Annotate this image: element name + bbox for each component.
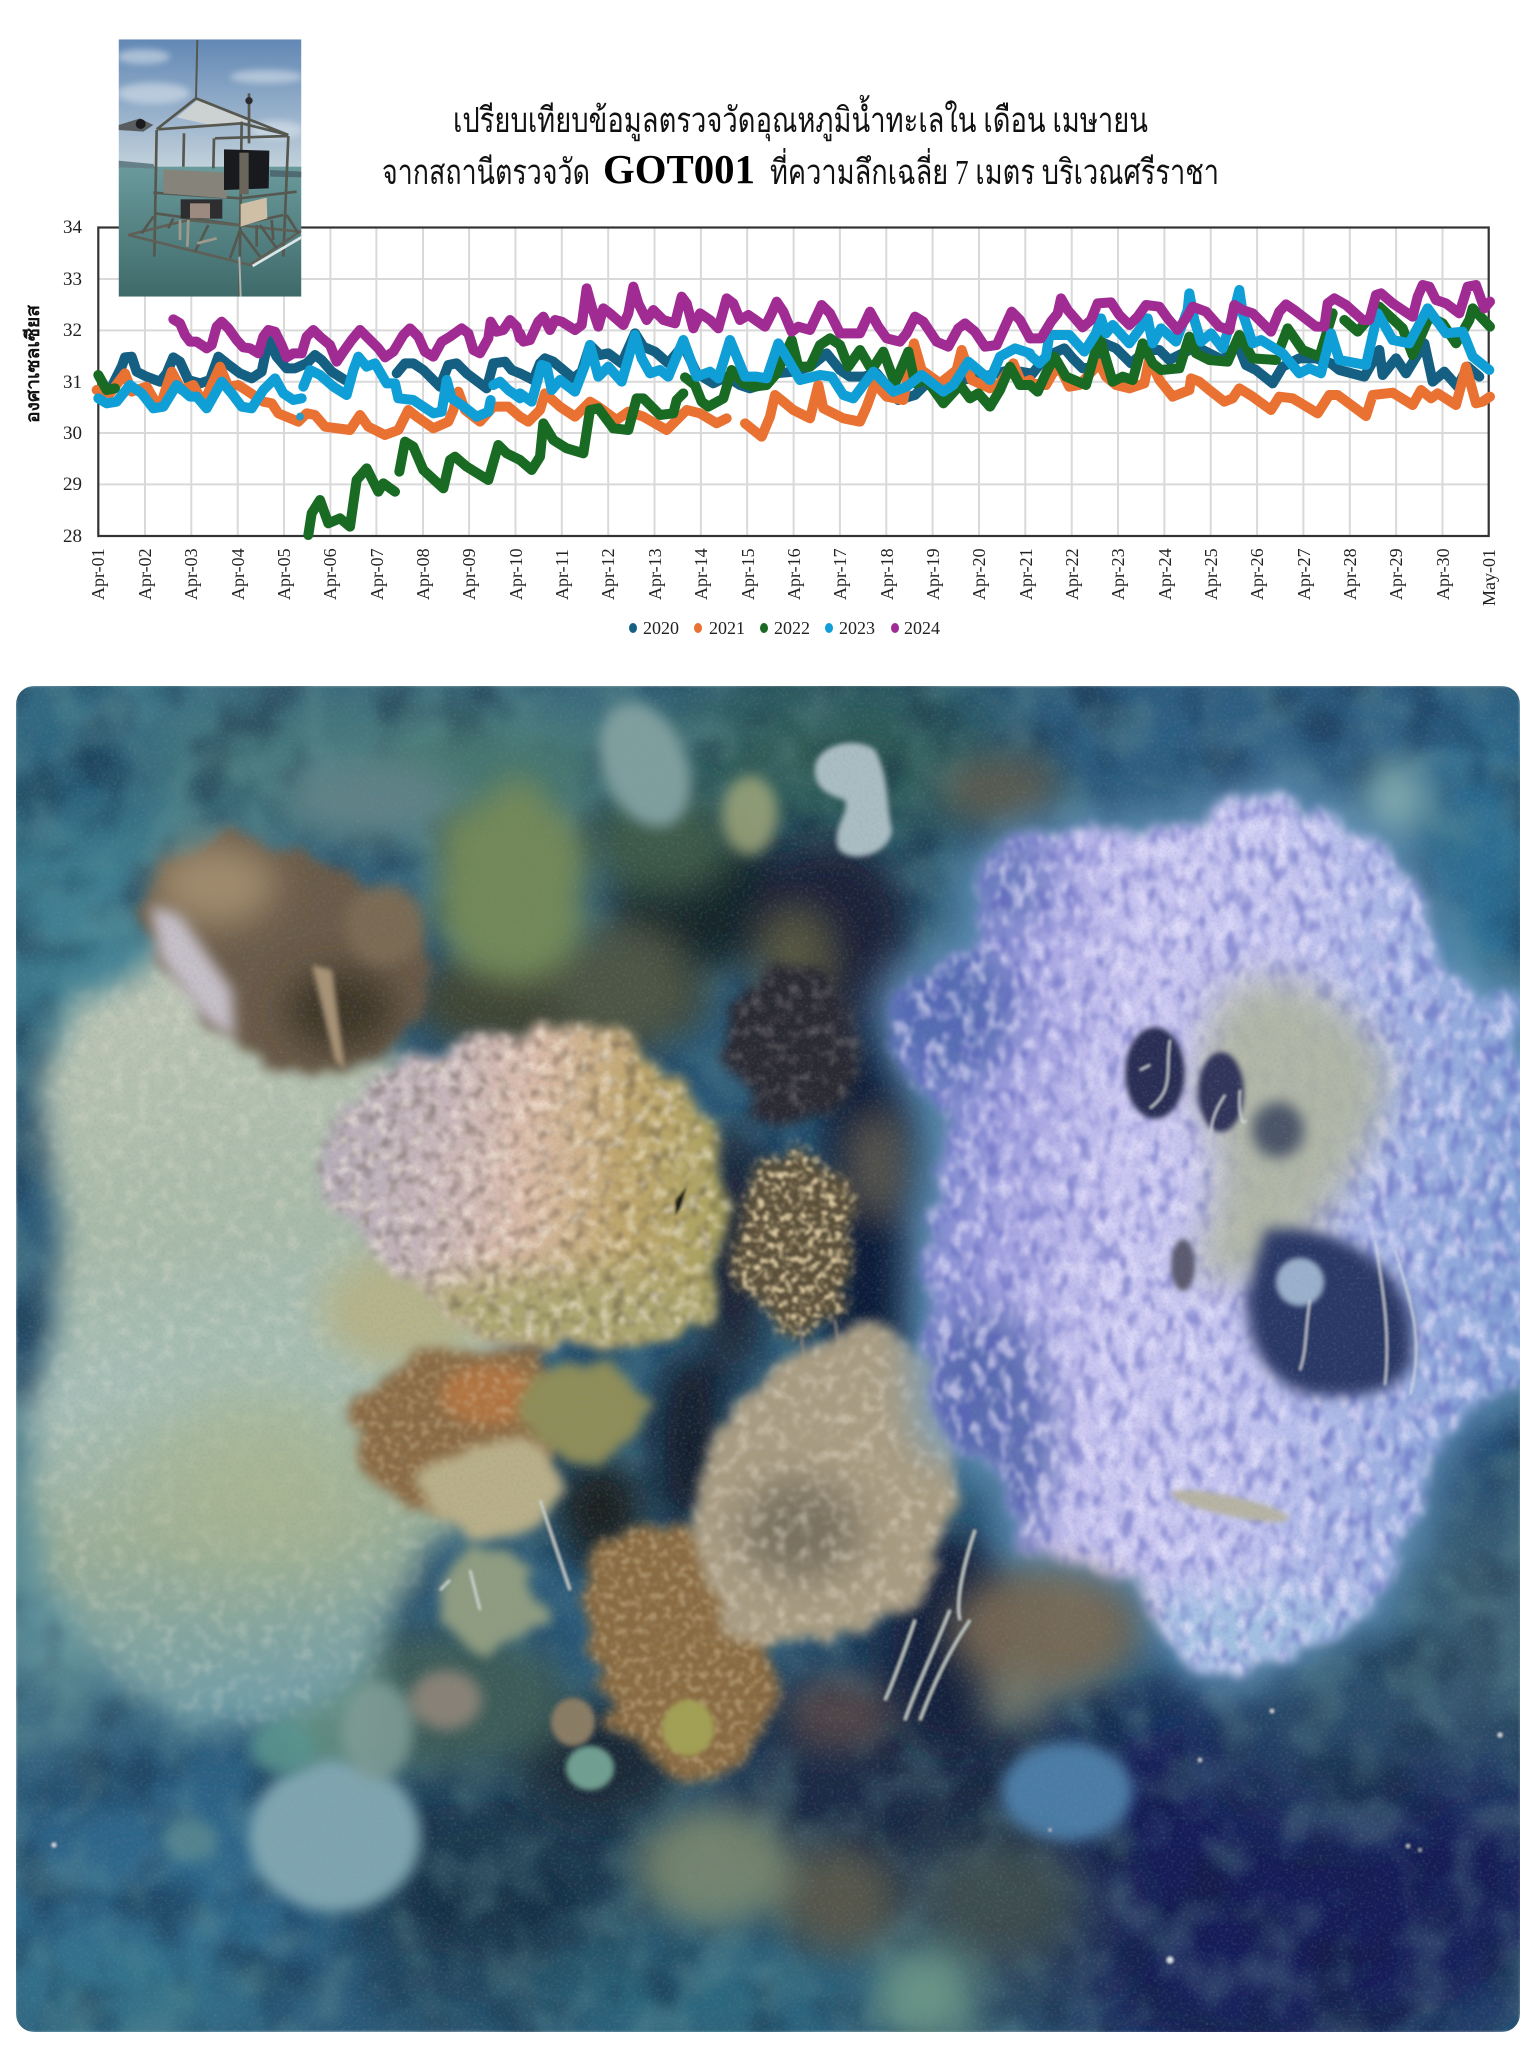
x axis labels: Apr-30 [1433, 548, 1453, 600]
y axis labels: 33 [63, 269, 82, 290]
tan lumpy coral, centre [680, 1300, 980, 1660]
x axis labels: Apr-14 [691, 548, 711, 600]
x axis labels: Apr-24 [1155, 548, 1175, 600]
x axis labels: Apr-10 [506, 548, 526, 600]
y axis labels: 28 [63, 526, 82, 547]
series 2020 [113, 333, 1479, 400]
series 2021 [97, 343, 1490, 437]
y axis labels: 29 [63, 474, 82, 495]
thin white filaments [1140, 1040, 1416, 1395]
y axis labels: 30 [63, 423, 82, 444]
x axis labels [88, 548, 1499, 606]
plot border [98, 228, 1489, 536]
x axis labels: Apr-27 [1294, 548, 1314, 600]
pink and yellow boulder coral [300, 1010, 740, 1370]
x axis labels: Apr-16 [784, 548, 804, 600]
dark channels [270, 730, 1430, 1820]
tan coral [422, 1438, 558, 1538]
x axis labels: Apr-20 [969, 548, 989, 600]
coral reef photo [0, 630, 1536, 2048]
legend: 2021 [709, 618, 745, 638]
brown coral, upper left [142, 837, 433, 1074]
x axis labels: Apr-28 [1340, 548, 1360, 600]
x axis labels: Apr-19 [923, 548, 943, 600]
x axis labels: Apr-29 [1386, 548, 1406, 600]
green coral [430, 790, 590, 980]
line chart: April water temperature [22, 217, 1499, 638]
soft mottling [16, 686, 1520, 2032]
y axis labels: 34 [63, 217, 82, 238]
brown coral, lower centre [551, 1500, 790, 1790]
y axis labels: 32 [63, 320, 82, 341]
y axis labels [63, 217, 82, 547]
x axis labels: May-01 [1479, 549, 1499, 606]
series 2023 [98, 290, 1489, 421]
light mottling [16, 686, 1520, 2032]
suspended particles [52, 1709, 1502, 1963]
blue round coral [1001, 1742, 1133, 1842]
x axis labels: Apr-17 [830, 548, 850, 600]
x axis labels: Apr-09 [459, 548, 479, 600]
x axis labels: Apr-03 [181, 548, 201, 600]
pale rounded coral, top [582, 689, 708, 841]
x axis labels: Apr-07 [367, 548, 387, 600]
x axis labels: Apr-23 [1108, 548, 1128, 600]
purple bleached coral [870, 770, 1536, 1690]
title: GOT001 [603, 146, 755, 192]
film grain [16, 686, 1520, 2032]
small corals, bottom left [162, 1670, 482, 1862]
beige algae patch [1190, 980, 1387, 1279]
x axis labels: Apr-02 [135, 548, 155, 600]
branching coral [710, 1130, 880, 1400]
x axis labels: Apr-15 [738, 548, 758, 600]
title: ที่ความลึกเฉลี่ย 7 เมตร บริเวณศรีราชา [770, 148, 1219, 192]
x axis labels: Apr-13 [645, 548, 665, 600]
x axis labels: Apr-12 [598, 548, 618, 600]
bleached coral, left [16, 900, 536, 1760]
x axis labels: Apr-25 [1201, 548, 1221, 600]
legend: 2023 [839, 618, 875, 638]
legend: 2024 [904, 618, 940, 638]
dark patches on purple coral [1125, 1027, 1413, 1528]
x axis labels: Apr-04 [228, 548, 248, 600]
x axis labels: Apr-26 [1247, 548, 1267, 600]
x axis labels: Apr-05 [274, 548, 294, 600]
legend: 2022 [774, 618, 810, 638]
title: จากสถานีตรวจวัด [382, 153, 590, 192]
x axis labels: Apr-06 [320, 548, 340, 600]
pale lobed coral, top centre [815, 743, 892, 856]
legend [629, 618, 940, 638]
y axis title: องศาเซลเซียส [22, 305, 44, 423]
series 2024 [173, 285, 1490, 362]
title [382, 94, 1219, 192]
x axis labels: Apr-21 [1016, 548, 1036, 600]
x axis labels: Apr-11 [552, 549, 572, 600]
pale round coral, bottom left [249, 1760, 421, 1912]
orange coral [340, 1330, 580, 1530]
pale green plate coral [440, 1540, 545, 1650]
yellow-green algae, top [722, 775, 778, 855]
station photo [117, 39, 303, 297]
black coral cluster [710, 950, 880, 1140]
brown corals, bottom centre [635, 1568, 1140, 2045]
x axis labels: Apr-08 [413, 548, 433, 600]
title: เปรียบเทียบข้อมูลตรวจวัดอุณหภูมิน้ำทะเลใน เดือน เมษายน [453, 94, 1148, 141]
x axis labels: Apr-22 [1062, 548, 1082, 600]
olive coral [523, 1362, 643, 1462]
white filaments, lower centre [440, 1500, 975, 1720]
x axis labels: Apr-01 [88, 548, 108, 600]
series 2022 [98, 307, 1490, 535]
y axis labels: 31 [63, 372, 82, 393]
murky water background [0, 630, 1536, 2048]
x axis labels: Apr-18 [877, 548, 897, 600]
legend: 2020 [643, 618, 679, 638]
